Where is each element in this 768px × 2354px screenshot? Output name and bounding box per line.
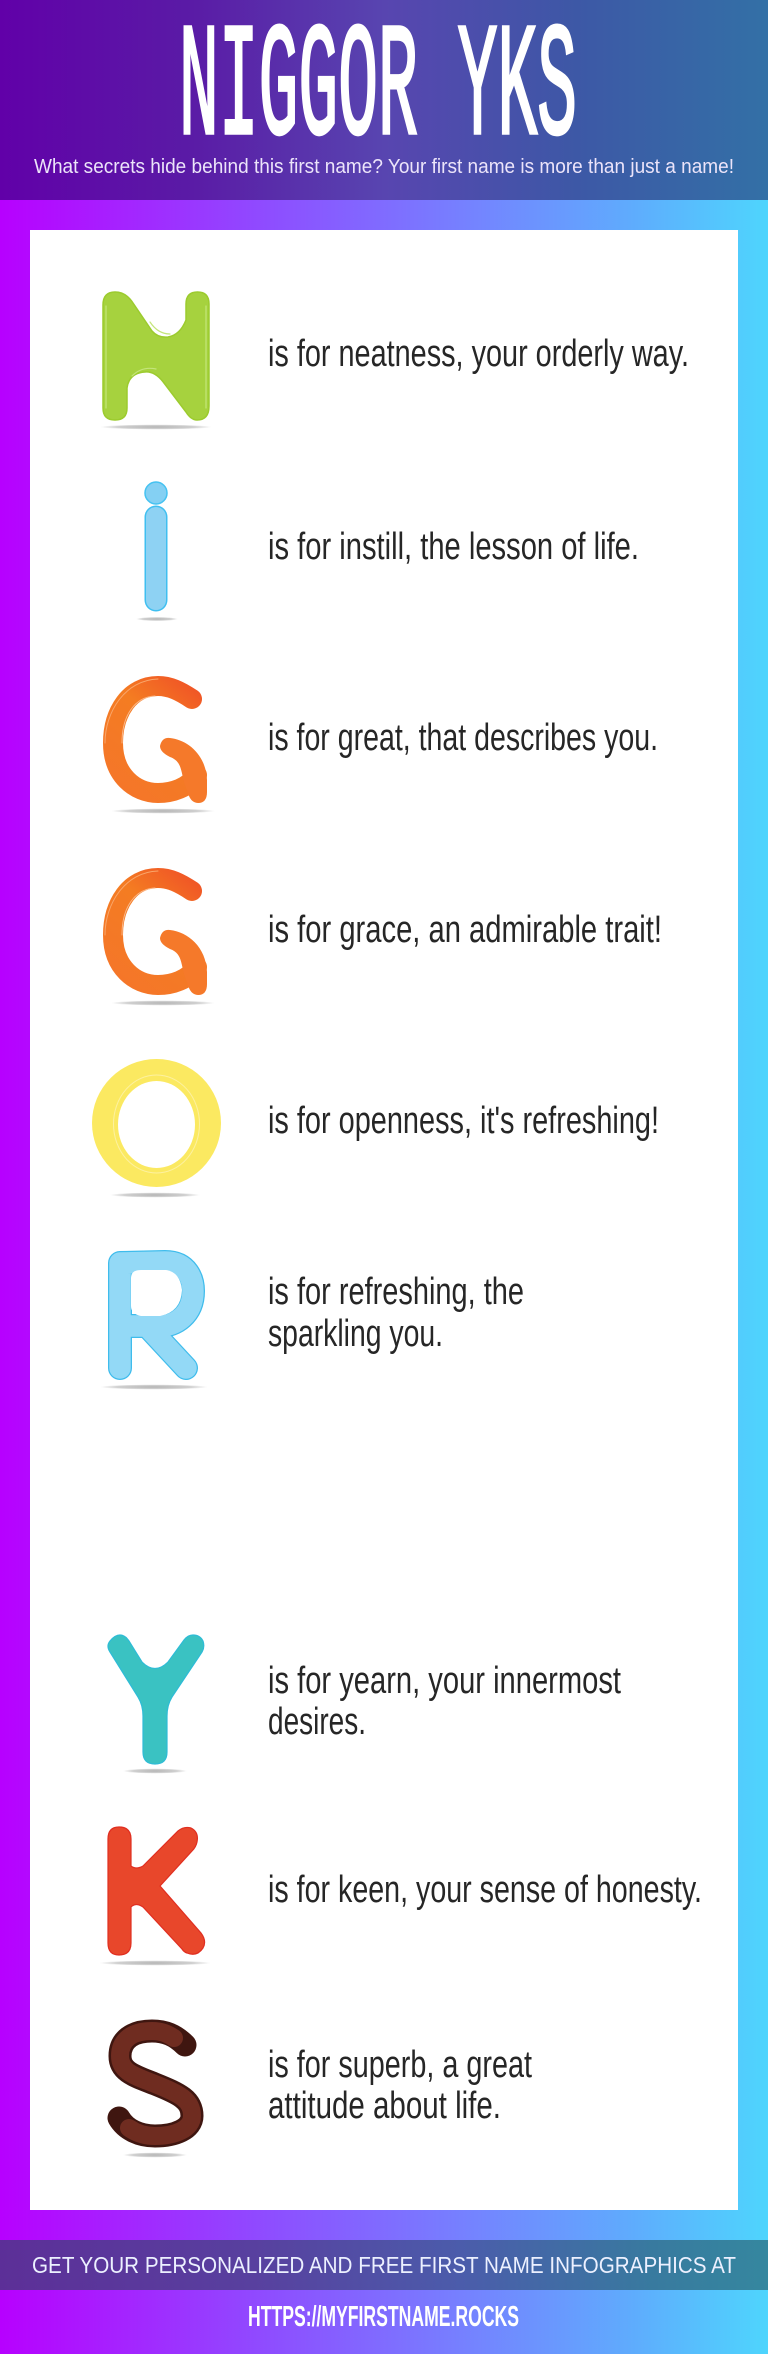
text: R	[268, 1271, 524, 1355]
text: R: is for refreshing, the	[268, 1271, 524, 1313]
text: Y: is for yearn, your innermost	[268, 1660, 621, 1702]
text: R: sparkling you.	[268, 1313, 443, 1355]
icon: letter K	[99, 1827, 211, 1966]
tagline: What secrets hide behind this first name? Your first name is more than just a name!	[34, 155, 734, 178]
text: S: is for superb, a great	[268, 2044, 532, 2086]
icon: letter O	[92, 1059, 221, 1198]
icon: letter N	[100, 292, 212, 430]
icon: letter G (second)	[105, 871, 215, 1006]
footer band	[0, 2240, 768, 2290]
text: I: is for instill, the lesson of life.	[268, 526, 639, 568]
icon: letter G	[105, 679, 215, 814]
text: S	[268, 2044, 532, 2127]
text: O: is for openness, it's refreshing!	[268, 1100, 659, 1142]
text: Y	[268, 1660, 621, 1743]
text: G second: is for grace, an admirable trait!	[268, 909, 662, 951]
text: S: attitude about life.	[268, 2085, 501, 2127]
icon: letter R	[100, 1262, 208, 1390]
icon: letter Y	[108, 1635, 204, 1774]
text: Y: desires.	[268, 1701, 366, 1743]
footer url: HTTPS://MYFIRSTNAME.ROCKS	[248, 2301, 519, 2333]
icon: letter S	[119, 2031, 192, 2158]
white content panel	[30, 230, 738, 2210]
icon: letter i	[136, 482, 178, 621]
header band	[0, 0, 768, 200]
